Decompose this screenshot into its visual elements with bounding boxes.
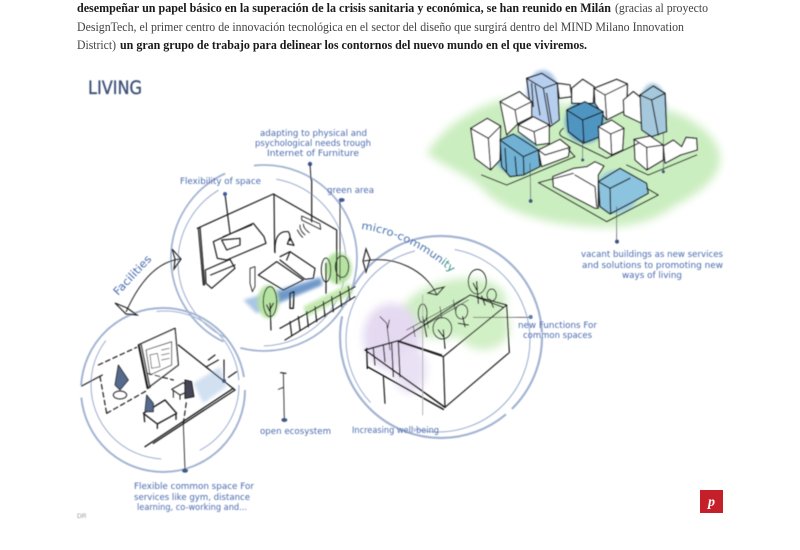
city sketch: vacant buildings: [427, 70, 720, 244]
circle outlines: [81, 165, 542, 472]
arrow: facilities link: [115, 249, 181, 315]
vacant buildings label: vacant buildings as new services: [581, 250, 723, 260]
labels: micro-community: Increasing well-being: [352, 426, 439, 436]
intro paragraph: desempeñar un papel básico en la superación de la crisis sanitaria y económica, se han reunido en Milán: [77, 0, 612, 15]
intro paragraph: un gran grupo de trabajo para delinear los contornos del nuevo mundo en el que viviremos.: [120, 37, 587, 52]
labels: facilities: Flexible common space For: [134, 482, 254, 492]
arrow: micro-community link: [363, 249, 444, 295]
micro-community scene: [363, 269, 533, 415]
intro paragraph: DesignTech, el primer centro de innovación tecnológica en el sector del diseño que surgirá dentro del MIND Milano Innovation: [77, 19, 684, 34]
labels: living room: Internet of Furniture: [267, 149, 359, 159]
vacant buildings label: [581, 250, 723, 281]
illustration: living sketch: [77, 68, 724, 520]
title: LIVING: LIVING: [88, 77, 142, 99]
intro paragraph: District): [77, 37, 116, 52]
credit: DR: DR: [77, 513, 87, 520]
facilities scene: [82, 328, 287, 473]
pinterest button: p: [707, 495, 715, 510]
labels: living room: psychological needs trough: [255, 139, 371, 149]
labels: micro-community: common spaces: [523, 331, 592, 341]
labels: facilities: [134, 427, 331, 513]
labels: living room: Flexibility of space: [180, 177, 261, 187]
labels: living room: green area: [327, 186, 374, 196]
labels: facilities: services like gym, distance: [134, 493, 250, 503]
intro paragraph: (gracias al proyecto: [615, 0, 708, 15]
labels: facilities: learning, co-working and...: [137, 503, 247, 513]
labels: micro-community: [352, 321, 597, 436]
vacant buildings label: ways of living: [622, 271, 682, 281]
pinterest button: [700, 490, 723, 513]
pin dot: internet of furniture: [308, 162, 312, 180]
intro paragraph: [77, 0, 708, 52]
labels: micro-community: new Functions For: [518, 321, 597, 331]
vacant buildings label: and solutions to promoting new: [582, 261, 723, 271]
labels: living room: adapting to physical and: [260, 129, 367, 139]
label: micro-community: micro-community: [361, 222, 456, 272]
labels: living room: [180, 129, 374, 196]
living room scene: [197, 180, 355, 340]
label: Facilities: Facilities: [111, 252, 154, 298]
labels: facilities: open ecosystem: [260, 427, 331, 437]
